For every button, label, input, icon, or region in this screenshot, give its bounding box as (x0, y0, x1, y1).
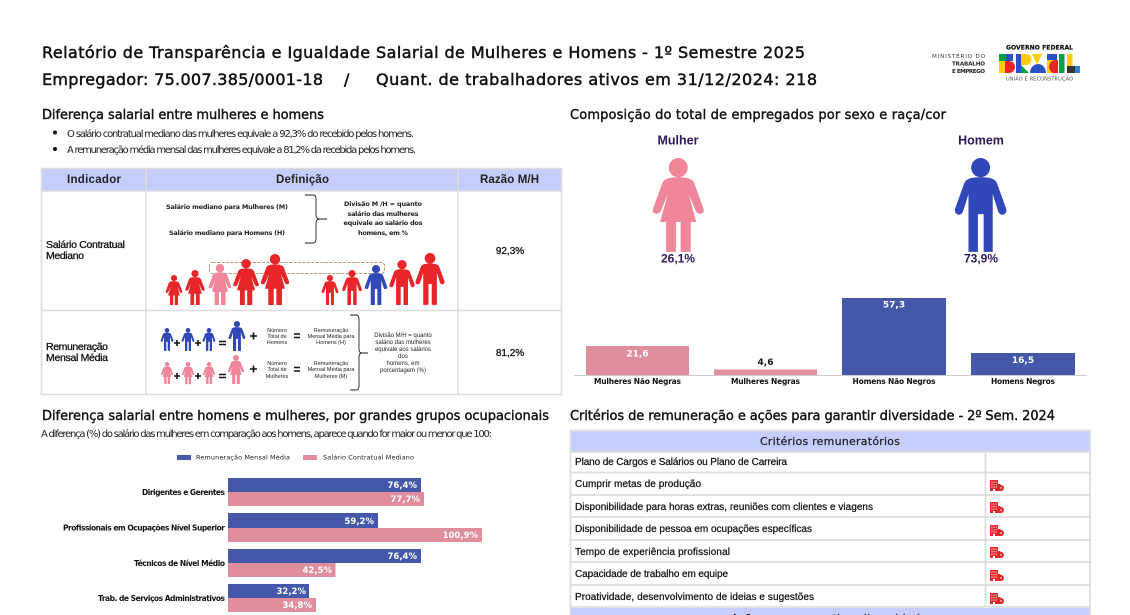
row label: remuneração mensal média: Mensal Média (46, 352, 108, 364)
horizontal bar chart: grupos ocupacionais: 34,8% (282, 601, 312, 611)
logo: ministério e governo federal: UNIÃO E RECONSTRUÇÃO (1006, 76, 1073, 82)
heading: critérios: Critérios de remuneração e ações para garantir diversidade - 2º Sem. 2024 (570, 409, 1055, 424)
heading: composição: Composição do total de empregados por sexo e raça/cor (570, 108, 947, 123)
definition: remuneração média: Mensal Média para (308, 367, 355, 373)
table header: Razão M/H (480, 174, 539, 186)
table: critérios remuneratórios (570, 430, 1091, 615)
criteria rows: Disponibilidade de pessoa em ocupações específicas (575, 524, 812, 535)
legend (177, 454, 414, 462)
row label: salário contratual mediano: Mediano (46, 250, 84, 262)
definition: salário mediano: homens, em % (358, 229, 408, 237)
definition: salário mediano: Salário mediano para Homens (H) (169, 229, 285, 237)
definition: salário mediano: Salário mediano para Mulheres (M) (166, 203, 288, 211)
horizontal bar chart: grupos ocupacionais: Dirigentes e Gerentes (142, 488, 226, 497)
definition: remuneração média: porcentagem (%) (380, 368, 426, 374)
pictogram: homem: 73,9% (964, 252, 998, 266)
logo: ministério e governo federal (932, 44, 1080, 82)
definition: remuneração média: Número (267, 361, 287, 367)
bar chart: composição por sexo e raça: 16,5 (1012, 356, 1034, 366)
bullet list: A remuneração média mensal das mulheres equivale a 81,2% da recebida pelos homens. (67, 144, 416, 156)
table header: Definição (276, 174, 329, 186)
bullet list: O salário contratual mediano das mulheres equivale a 92,3% do recebido pelos homens. (67, 128, 414, 140)
bar chart: composição por sexo e raça (574, 298, 1087, 386)
pictogram: homem (955, 134, 1006, 266)
bar chart: composição por sexo e raça: 21,6 (626, 350, 649, 360)
pictogram: homem: Homem (958, 134, 1004, 148)
horizontal bar chart: grupos ocupacionais: 100,9% (443, 531, 478, 541)
logo: ministério e governo federal: GOVERNO FEDERAL (1006, 44, 1073, 52)
definition: salário mediano: salário das mulheres (348, 210, 419, 218)
row label: remuneração mensal média: Remuneração (46, 341, 108, 353)
table heading: Critérios remuneratórios (760, 435, 900, 448)
definition: remuneração média: Mulheres (266, 374, 289, 380)
definition: remuneração média: Divisão M/H = quanto (374, 333, 432, 339)
pictogram: mulher: Mulher (658, 134, 699, 148)
horizontal bar chart: grupos ocupacionais: 76,4% (388, 552, 417, 562)
table header (67, 174, 539, 186)
title (42, 43, 817, 89)
bar chart: composição por sexo e raça: Mulheres Não Negras (594, 377, 682, 386)
table header: Indicador (67, 174, 122, 186)
horizontal bar chart: grupos ocupacionais: 77,7% (390, 495, 420, 505)
pictogram: mulher (653, 134, 704, 266)
definition: salário mediano (166, 195, 423, 243)
criteria rows: Tempo de experiência profissional (575, 547, 730, 558)
criteria rows: Cumprir metas de produção (575, 479, 701, 490)
heading: diferença salarial: Diferença salarial entre mulheres e homens (42, 108, 324, 123)
criteria rows: Plano de Cargos e Salários ou Plano de Carreira (575, 457, 787, 468)
bar chart: composição por sexo e raça: Homens Não Negros (852, 377, 936, 386)
ratio: 81,2%: 81,2% (496, 348, 524, 359)
horizontal bar chart: grupos ocupacionais: 59,2% (344, 517, 374, 527)
bar chart: composição por sexo e raça: 4,6 (758, 358, 773, 368)
logo: ministério e governo federal: MINISTÉRIO DO (932, 52, 986, 60)
definition: remuneração média (161, 315, 432, 390)
definition: remuneração média: Homens (267, 340, 287, 346)
horizontal bar chart: grupos ocupacionais (63, 478, 482, 612)
subtitle: grupos ocupacionais: A diferença (%) do salário das mulheres em comparação aos homens, aparece quando for maior ou menor que 100: (41, 428, 492, 440)
legend: Salário Contratual Mediano (323, 454, 414, 462)
title: / (344, 70, 350, 89)
row label: salário contratual mediano (46, 239, 125, 262)
definition: remuneração média: Mulheres (M) (315, 374, 347, 380)
bar chart: composição por sexo e raça: Homens Negros (991, 377, 1056, 386)
definition: remuneração média: homens, em (386, 361, 420, 367)
icons: building markers (990, 480, 1004, 604)
title: Quant. de trabalhadores ativos em 31/12/2024: 218 (376, 70, 817, 89)
row label: salário contratual mediano: Salário Contratual (46, 239, 125, 251)
definition: remuneração média: Homens (H) (316, 340, 346, 346)
definition: remuneração média: dos (398, 354, 408, 360)
definition: salário mediano: equivale ao salário dos (344, 219, 423, 227)
table heading: ações (571, 608, 1089, 615)
definition: remuneração média: Remuneração (314, 361, 348, 367)
title: Empregador: 75.007.385/0001-18 (42, 70, 323, 89)
icon row: median comparison people (166, 253, 445, 305)
horizontal bar chart: grupos ocupacionais: 42,5% (302, 566, 332, 576)
definition: remuneração média: Mensal Média para (308, 334, 355, 340)
logo: ministério e governo federal: E EMPREGO (952, 69, 985, 75)
criteria rows: Proatividade, desenvolvimento de ideias e sugestões (575, 592, 814, 603)
horizontal bar chart: grupos ocupacionais: Técnicos de Nível Médio (134, 559, 225, 568)
pictogram: mulher: 26,1% (661, 252, 695, 266)
definition: remuneração média: Total de (267, 367, 287, 373)
bar chart: composição por sexo e raça: 57,3 (883, 300, 905, 310)
bullet list (53, 128, 416, 156)
criteria rows: Capacidade de trabalho em equipe (575, 569, 728, 580)
ratio: 92,3%: 92,3% (496, 246, 524, 257)
definition: remuneração média: Remuneração (314, 328, 348, 334)
legend: Remuneração Mensal Média (196, 454, 290, 462)
horizontal bar chart: grupos ocupacionais: Trab. de Serviços Administrativos (98, 594, 226, 603)
bar chart: composição por sexo e raça: Mulheres Negras (731, 377, 801, 386)
definition: remuneração média: Total de (267, 334, 287, 340)
horizontal bar chart: grupos ocupacionais: 76,4% (388, 481, 417, 491)
criteria rows (575, 457, 873, 603)
heading: grupos ocupacionais: Diferença salarial entre homens e mulheres, por grandes grupos ocupacionais (42, 409, 549, 424)
definition: salário mediano: Divisão M /H = quanto (344, 200, 423, 208)
definition: remuneração média: salário das mulheres (375, 340, 431, 346)
title: Relatório de Transparência e Igualdade Salarial de Mulheres e Homens - 1º Semestre 2025 (42, 43, 805, 62)
table: indicadores (41, 168, 562, 395)
row label: remuneração mensal média (46, 341, 108, 364)
criteria rows: Disponibilidade para horas extras, reuniões com clientes e viagens (575, 502, 873, 513)
logo: ministério e governo federal: TRABALHO (952, 62, 985, 68)
definition: remuneração média: Número (267, 328, 287, 334)
horizontal bar chart: grupos ocupacionais: Profissionais em Ocupações Nível Superior (63, 524, 225, 532)
horizontal bar chart: grupos ocupacionais: 32,2% (276, 587, 306, 597)
definition: remuneração média: equivale aos salários (375, 347, 431, 353)
